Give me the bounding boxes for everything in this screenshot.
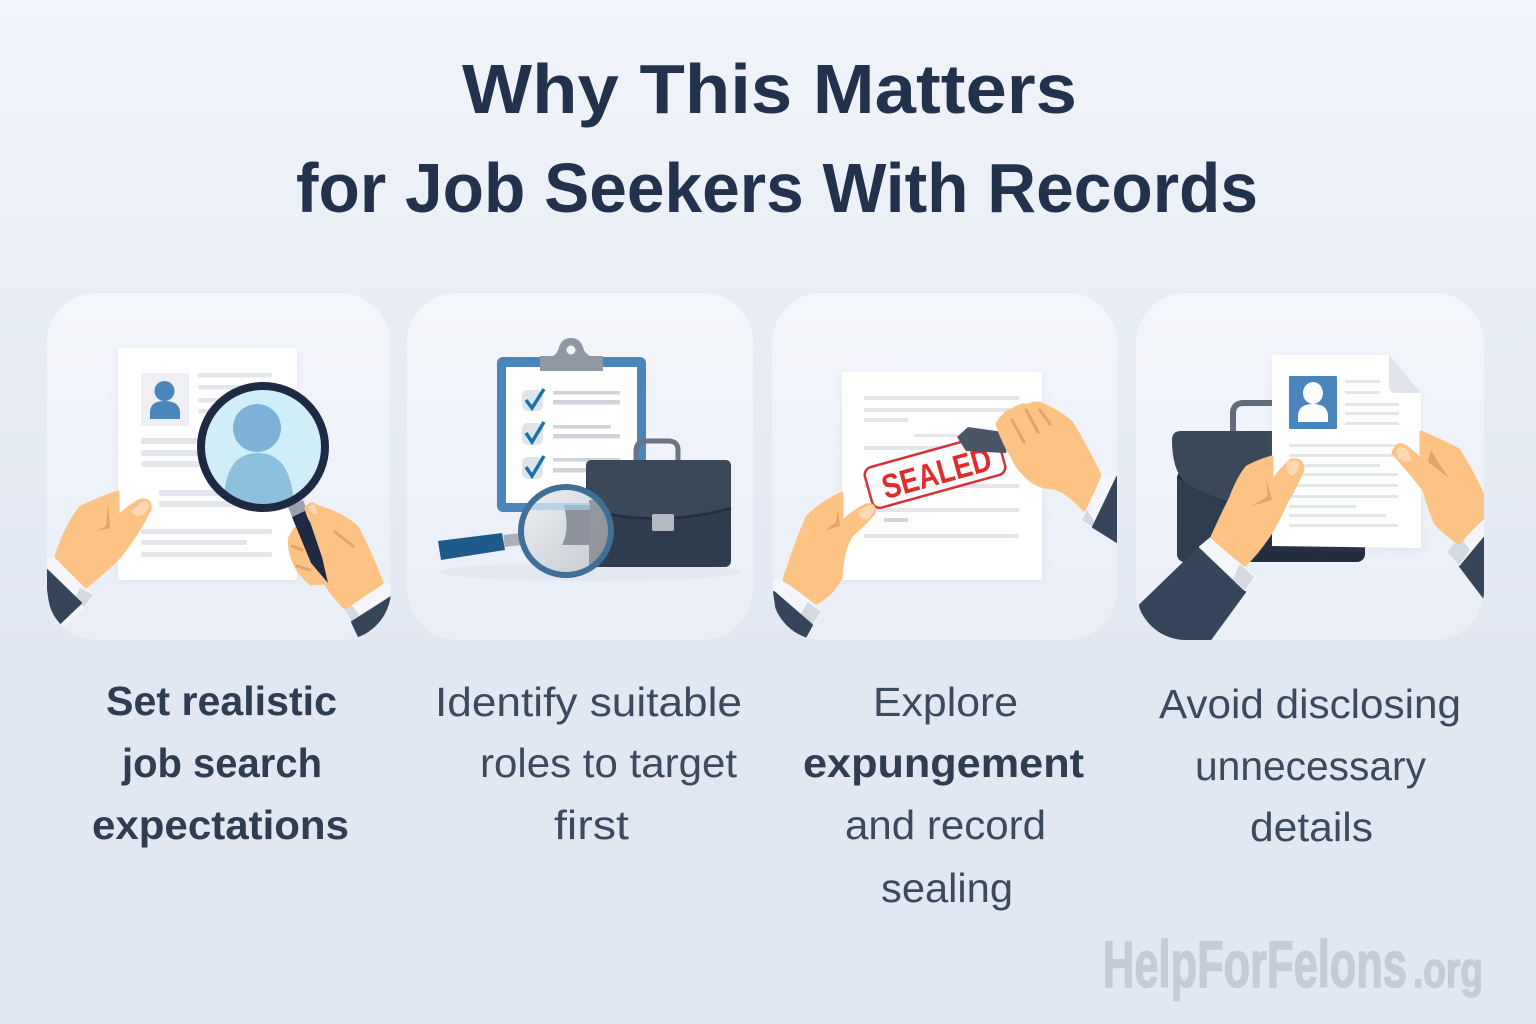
panel: set realistic expectations [47,293,391,640]
illustration: resume under magnifying glass held by hands [47,348,391,637]
briefcase [586,441,731,567]
caption: identify suitable roles: first [554,802,630,848]
card background [407,293,753,640]
left hand [774,493,874,638]
caption: set realistic job search expectations: expectations [92,802,349,848]
watermark: .org [1413,942,1483,998]
caption: avoid disclosing unnecessary details: unnecessary [1195,743,1426,789]
caption: avoid disclosing unnecessary details: Avoid disclosing [1159,681,1461,727]
caption: set realistic job search expectations [92,678,349,848]
title: Why This Matters [462,50,1077,128]
caption: explore expungement and record sealing: sealing [881,865,1013,911]
caption: identify suitable roles: Identify suitable [435,679,742,725]
title [296,50,1258,227]
right hand and sleeve [1393,432,1484,598]
caption: explore expungement and record sealing: expungement [803,740,1084,786]
marker pen [957,427,1010,453]
sealed stamp: SEALED [878,440,996,507]
caption: set realistic job search expectations: Set realistic [106,678,337,724]
illustration: resume and briefcase [1140,355,1484,640]
caption: explore expungement and record sealing: Explore [873,679,1018,725]
resume held up [1272,355,1421,548]
left hand [47,492,150,628]
ground shadow [440,563,740,581]
right hand gripping handle [289,505,391,637]
caption: set realistic job search expectations: job search [121,740,322,786]
magnifying glass [201,386,328,583]
right hand [997,403,1117,542]
clipboard with checklist [497,338,646,512]
left hand and sleeve [1140,457,1303,640]
caption: explore expungement and record sealing: and record [845,802,1046,848]
caption: avoid disclosing unnecessary details: details [1250,804,1373,850]
card background [772,293,1117,640]
panel: avoid disclosing details [1136,293,1484,640]
card background [1136,293,1484,640]
caption: identify suitable roles: roles to target [480,740,738,786]
illustration: sealing a record [774,372,1117,638]
panel: identify suitable roles [407,293,753,578]
caption: avoid disclosing unnecessary details [1159,681,1461,850]
thumb over handle [304,502,318,523]
card background [47,293,390,640]
document [842,372,1042,580]
caption: identify suitable roles [435,679,742,848]
panel: explore expungement [772,293,1117,640]
title: for Job Seekers With Records [296,149,1258,227]
caption: explore expungement and record sealing [803,679,1084,911]
resume document [118,348,297,580]
magnifying glass [438,487,619,575]
briefcase [1172,403,1365,562]
